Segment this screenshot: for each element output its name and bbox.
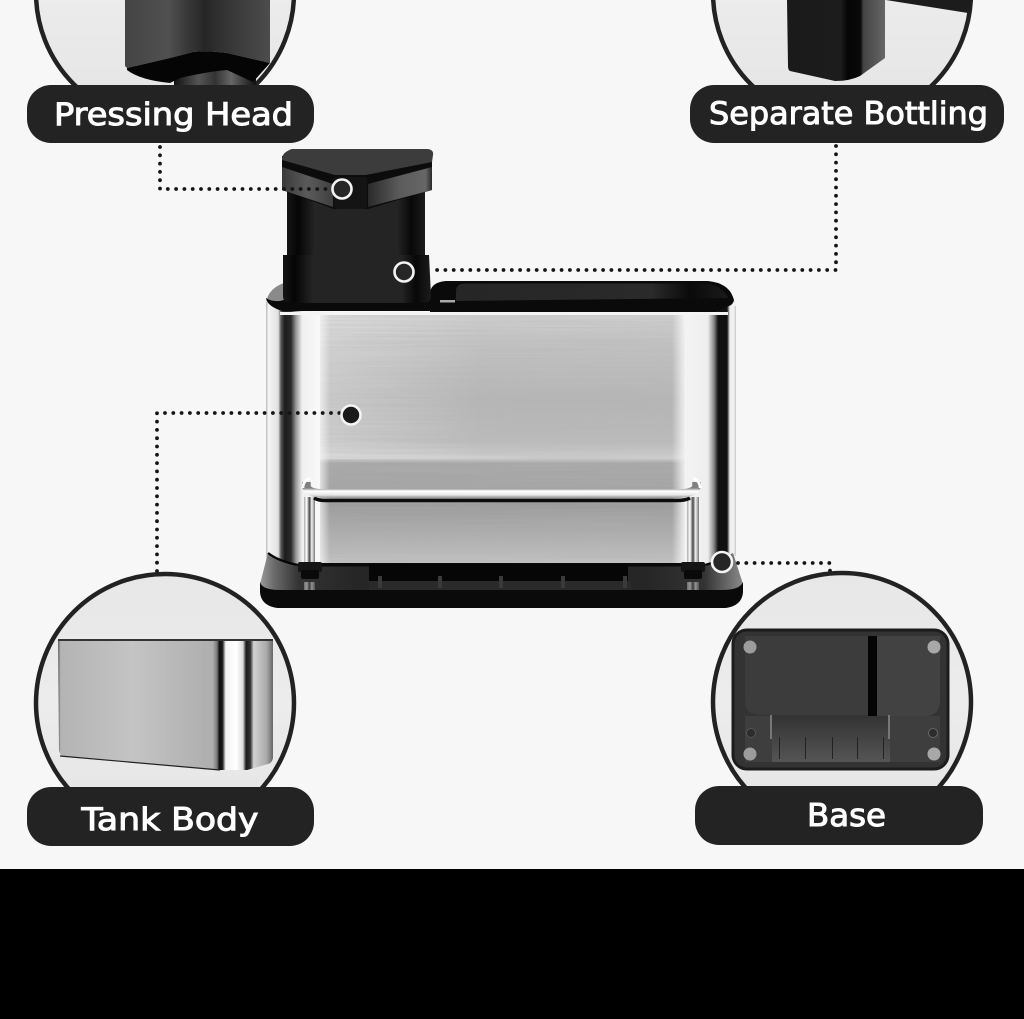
sponge rail bbox=[298, 478, 705, 590]
pressing head label: Pressing Head bbox=[54, 97, 293, 133]
leader line: pressing head bbox=[160, 147, 332, 189]
sponge compartment rim bbox=[430, 281, 734, 312]
base label: Base bbox=[807, 798, 886, 834]
icon: separate bottling closeup bbox=[787, 0, 975, 81]
leader line: base bbox=[738, 563, 830, 571]
icon: pressing head closeup bbox=[125, 0, 270, 88]
callout: base bbox=[695, 573, 983, 845]
base label bbox=[695, 786, 983, 845]
pump collar bbox=[283, 255, 431, 303]
marker: base bbox=[712, 552, 732, 572]
pressing head label bbox=[27, 85, 314, 143]
left rim of tank bbox=[266, 283, 440, 311]
tank body label: Tank Body bbox=[80, 802, 258, 838]
icon: base underside closeup bbox=[733, 630, 948, 769]
leader line: separate bottling bbox=[432, 146, 836, 270]
separate bottling label: Separate Bottling bbox=[709, 96, 988, 132]
tank body label bbox=[27, 787, 314, 846]
bottom black band bbox=[0, 869, 1024, 1019]
marker: pressing head bbox=[332, 180, 352, 198]
marker: tank body bbox=[342, 406, 360, 424]
base circle bbox=[713, 573, 971, 831]
pump head cap bbox=[282, 149, 433, 209]
callout: tank body bbox=[27, 574, 314, 846]
tank body circle bbox=[36, 574, 294, 832]
black base tray bbox=[260, 553, 743, 608]
callout: pressing head bbox=[27, 0, 314, 143]
icon: tank body closeup bbox=[58, 639, 273, 770]
pump neck bbox=[287, 185, 425, 255]
marker: separate bottling bbox=[394, 262, 414, 282]
leader line: tank body bbox=[157, 413, 340, 571]
separate bottling label bbox=[690, 85, 1004, 143]
pressing head circle bbox=[36, 0, 294, 122]
product: soap dispenser caddy bbox=[260, 149, 743, 608]
separate bottling circle bbox=[713, 0, 971, 122]
callout: separate bottling bbox=[690, 0, 1004, 143]
stainless tank bbox=[266, 300, 736, 566]
